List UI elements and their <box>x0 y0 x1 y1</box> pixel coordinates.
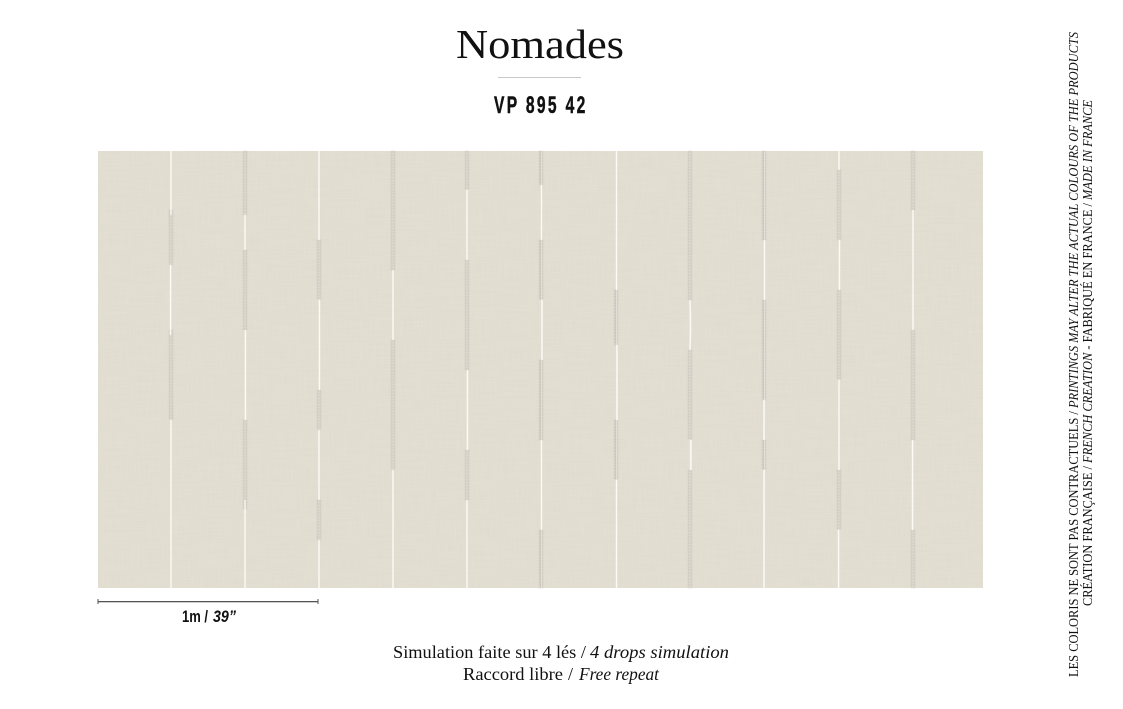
title: Nomades <box>456 21 624 67</box>
simulation note: Simulation faite sur 4 lés / <box>393 642 586 662</box>
simulation note <box>393 642 729 662</box>
scale label: 39” <box>213 608 237 626</box>
vertical origin note: CRÉATION FRANÇAISE / FRENCH CREATION - FABRIQUÉ EN FRANCE / MADE IN FRANCE <box>1079 100 1096 606</box>
wallpaper pattern panel <box>98 151 983 588</box>
scale label <box>182 608 237 626</box>
repeat note <box>463 664 660 684</box>
simulation note: 4 drops simulation <box>590 642 729 662</box>
repeat note: / <box>568 664 573 684</box>
vertical disclaimer: LES COLORIS NE SONT PAS CONTRACTUELS / PRINTINGS MAY ALTER THE ACTUAL COLOURS OF THE PRODUCTS <box>1067 32 1082 677</box>
reference code: VP 895 42 <box>494 93 588 119</box>
title divider <box>498 77 581 78</box>
repeat note: Raccord libre <box>463 664 563 684</box>
scale bar <box>98 599 318 604</box>
repeat note: Free repeat <box>578 664 660 684</box>
scale label: 1m / <box>182 608 208 626</box>
